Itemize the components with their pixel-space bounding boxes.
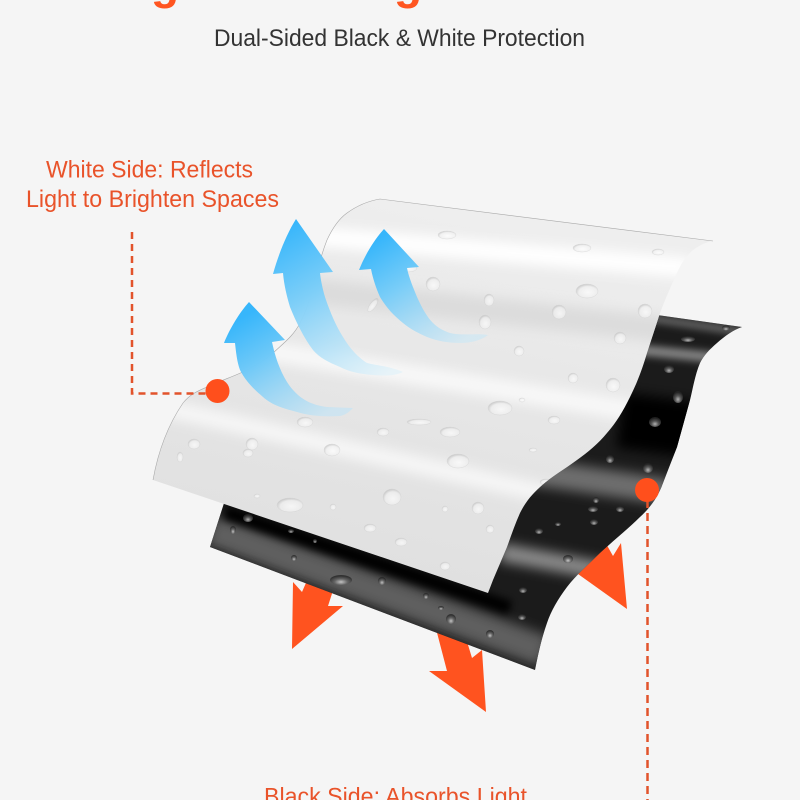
subtitle: Dual-Sided Black & White Protection: [214, 25, 585, 52]
arrow: down middle: [429, 625, 486, 712]
arrow: right: [359, 229, 488, 343]
dashed leader: white side: [132, 232, 206, 394]
arrow: down left: [292, 560, 343, 649]
dashed leader: black side: [646, 500, 649, 800]
water droplets on white side: [177, 231, 664, 570]
title (cropped at top edge, only descenders visible): [151, 0, 422, 9]
callout label: white side: Light to Brighten Spaces: [26, 186, 279, 213]
callout label: white side: White Side: Reflects: [46, 156, 253, 184]
black sheet: [210, 315, 742, 670]
arrow: down right: [578, 540, 627, 609]
marker dot: white side: [206, 379, 230, 403]
arrow: left: [224, 302, 353, 416]
orange arrows behind black sheet: heat absorbed: [292, 540, 627, 712]
marker dot: black side: [635, 478, 659, 502]
blue arrows: reflected light: [224, 219, 488, 416]
arrow: middle: [273, 219, 403, 376]
water droplets on black side: [230, 326, 730, 638]
callout label: white side: [26, 156, 279, 213]
white sheet: [152, 198, 713, 593]
